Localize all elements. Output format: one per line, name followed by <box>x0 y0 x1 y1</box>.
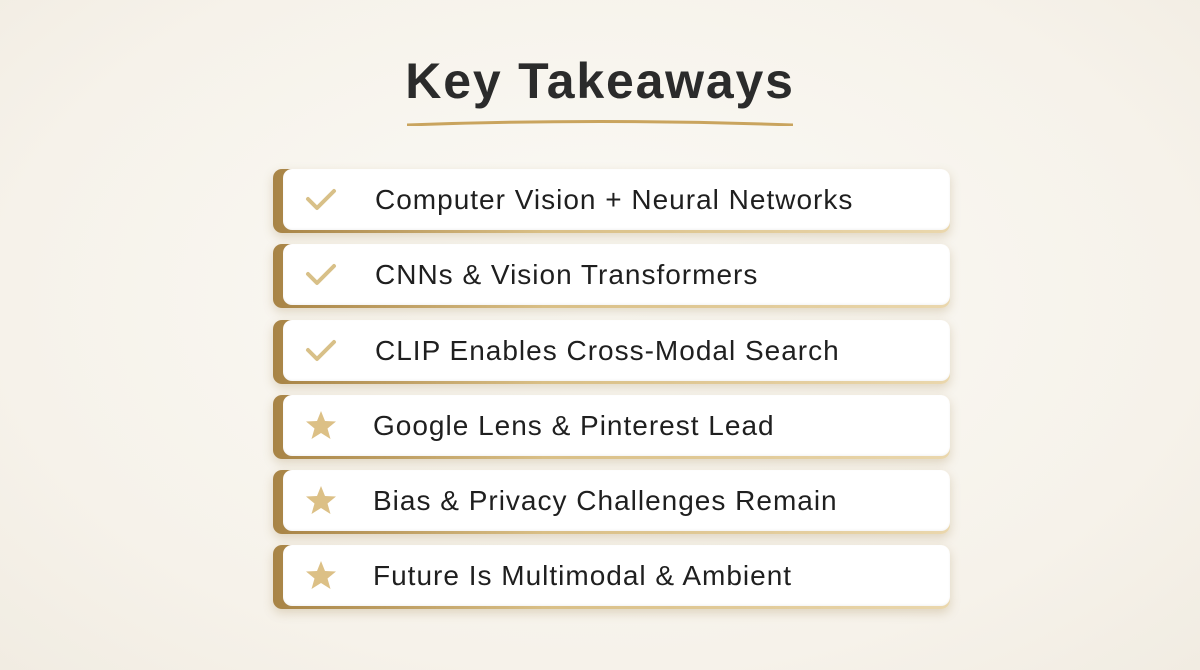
title underline <box>407 120 793 126</box>
text: CNNs & Vision Transformers <box>375 259 758 290</box>
card: google lens <box>273 395 950 459</box>
card: clip <box>273 320 950 384</box>
text: Google Lens & Pinterest Lead <box>373 410 775 441</box>
text: Computer Vision + Neural Networks <box>375 184 853 215</box>
icon: check <box>306 188 336 210</box>
card: cnns <box>273 244 950 308</box>
icon: check <box>306 264 336 286</box>
icon: star <box>306 561 336 589</box>
text: CLIP Enables Cross-Modal Search <box>375 335 840 366</box>
icon: check <box>306 340 336 362</box>
card: computer vision <box>273 169 950 233</box>
card: future <box>273 545 950 609</box>
icon: star <box>306 486 336 514</box>
text: Future Is Multimodal & Ambient <box>373 560 792 591</box>
icon: star <box>306 411 336 439</box>
title: Key Takeaways <box>405 53 795 109</box>
text: Bias & Privacy Challenges Remain <box>373 485 838 516</box>
card: bias <box>273 470 950 534</box>
